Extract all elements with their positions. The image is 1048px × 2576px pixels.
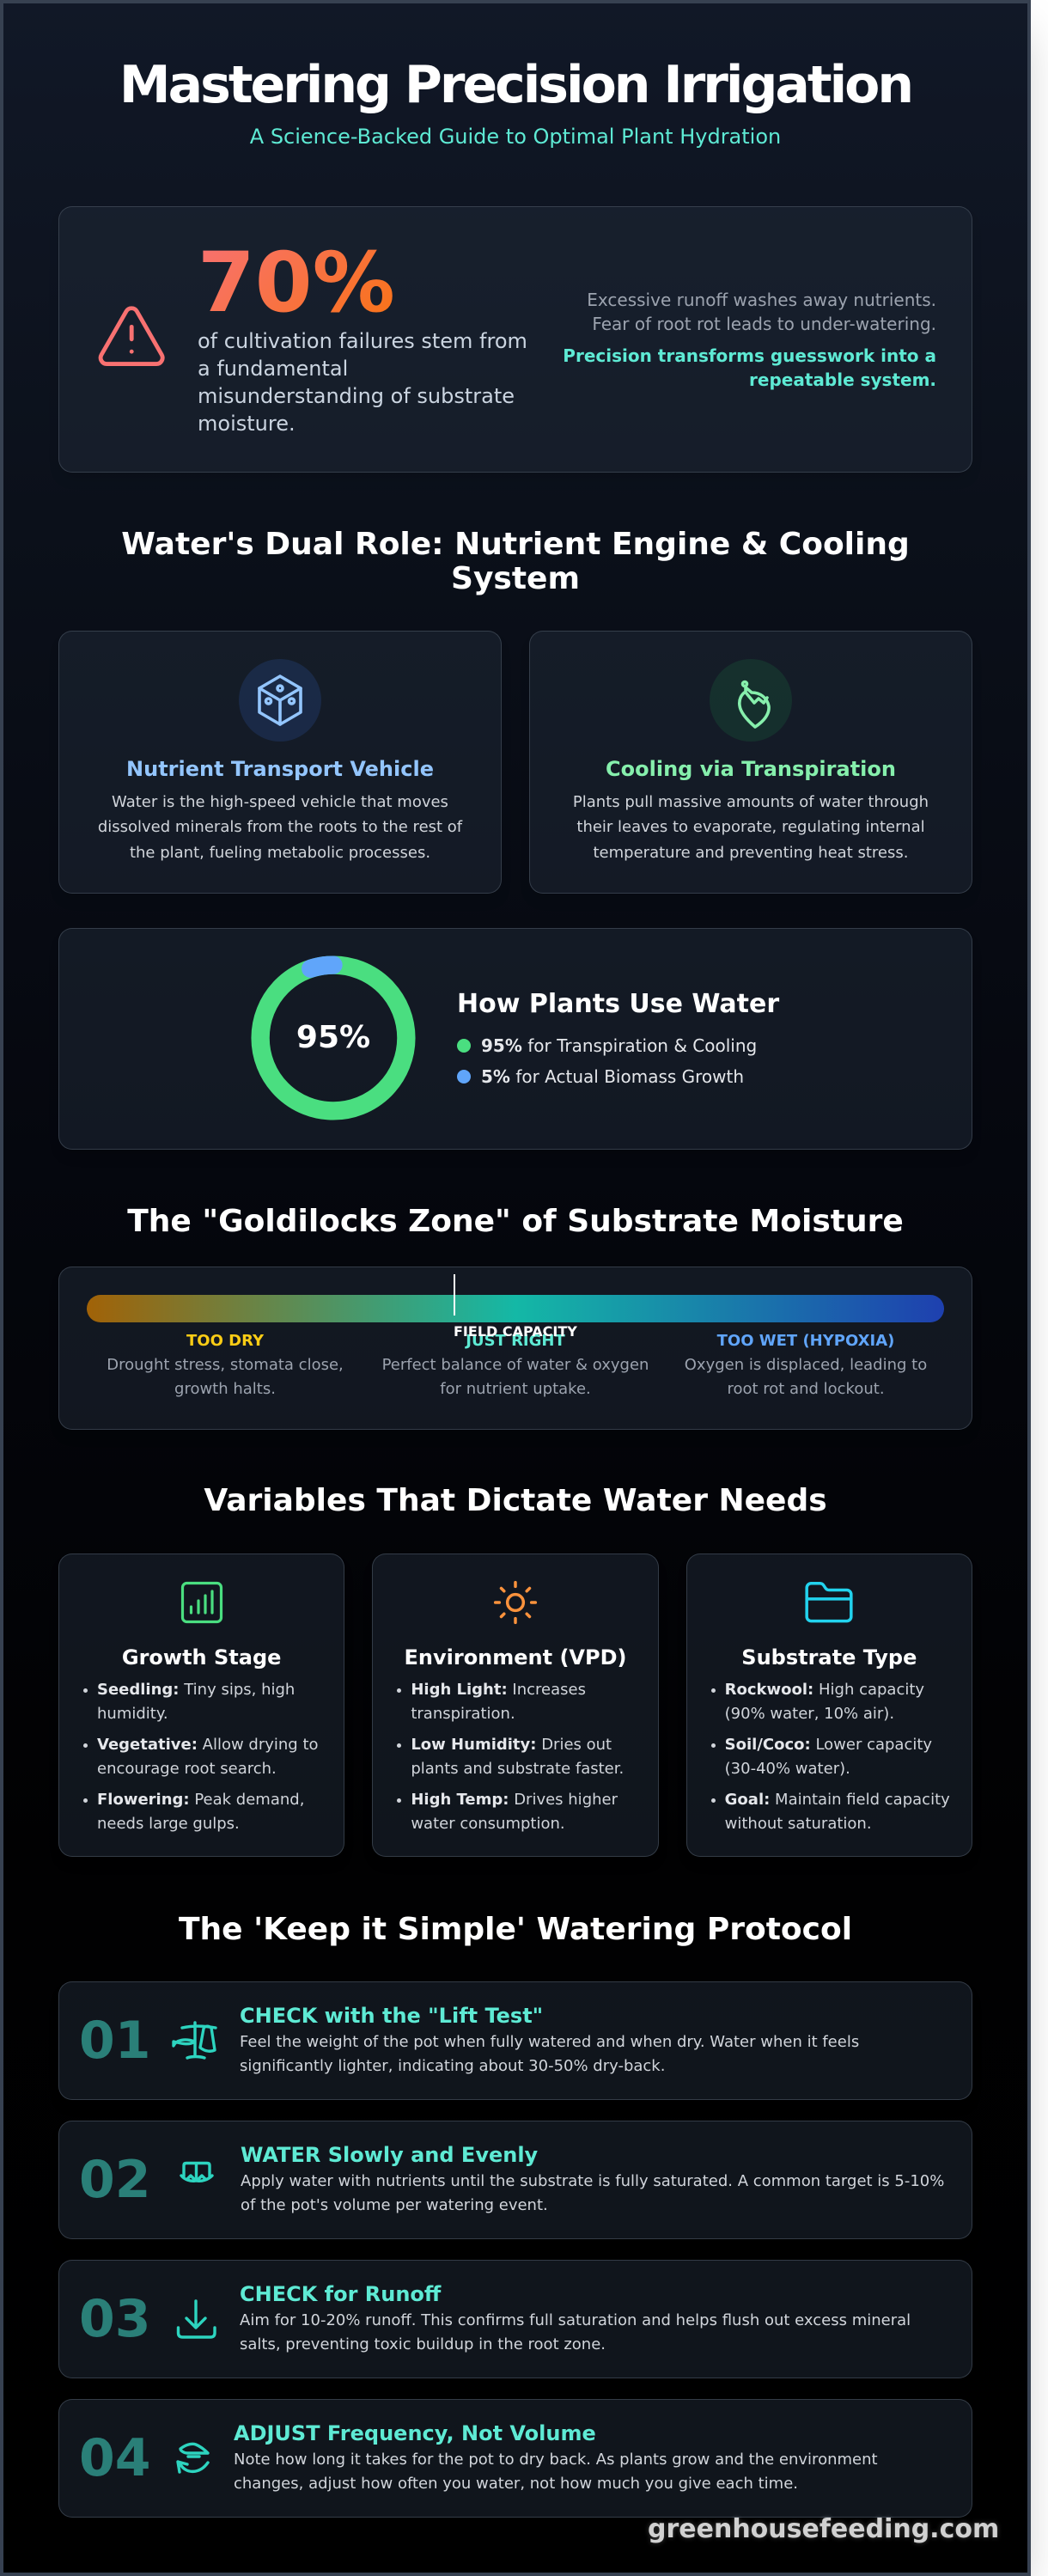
step heading: ADJUST Frequency, Not Volume xyxy=(234,2421,596,2445)
icon: cube xyxy=(258,675,302,726)
big number 70%: 70% xyxy=(198,235,395,331)
step text: Aim for 10-20% runoff. This confirms full saturation and helps flush out excess mineral xyxy=(240,2311,911,2329)
step heading: CHECK with the "Lift Test" xyxy=(240,2004,543,2028)
step text: of the pot's volume per watering event. xyxy=(241,2196,548,2214)
item: soil/coco xyxy=(711,1736,932,1778)
panel: cooling xyxy=(529,631,972,894)
watermark: greenhousefeeding.com xyxy=(648,2514,999,2544)
item: high light: High Light: Increases xyxy=(411,1681,586,1699)
item: low humidity: plants and substrate faster. xyxy=(411,1760,624,1778)
step text: changes, adjust how often you water, not how much you give each time. xyxy=(234,2475,798,2493)
field capacity label: FIELD CAPACITY xyxy=(454,1323,577,1340)
step text: Apply water with nutrients until the substrate is fully saturated. A common target is 5-10% xyxy=(241,2172,944,2190)
icon: blue circle with cube xyxy=(239,659,321,742)
item: high light: transpiration. xyxy=(411,1705,515,1723)
just right column: JUST RIGHT xyxy=(466,1332,565,1350)
item: goal: Goal: Maintain field capacity xyxy=(725,1791,950,1809)
item: low humidity xyxy=(397,1736,624,1778)
legend: transpiration: 95% for Transpiration & Cooling xyxy=(481,1035,757,1056)
step text: Note how long it takes for the pot to dry back. As plants grow and the environment xyxy=(234,2451,878,2469)
step number: 04 xyxy=(79,2428,151,2488)
item: high temp: High Temp: Drives higher xyxy=(411,1791,618,1809)
panel: water use donut chart xyxy=(58,928,972,1150)
step text: Feel the weight of the pot when fully watered and when dry. Water when it feels xyxy=(240,2033,859,2051)
item: high light xyxy=(397,1681,586,1723)
item: vegetative: encourage root search. xyxy=(97,1760,277,1778)
step text xyxy=(234,2451,878,2493)
item: goal xyxy=(711,1791,950,1833)
step number: 02 xyxy=(79,2150,151,2210)
card text: their leaves to evaporate, regulating internal xyxy=(576,818,925,836)
card heading: Growth Stage xyxy=(122,1645,281,1670)
title: Mastering Precision Irrigation xyxy=(119,55,911,115)
too dry column: TOO DRY xyxy=(186,1332,264,1350)
step text xyxy=(241,2172,944,2214)
heading: goldilocks: The "Goldilocks Zone" of Substrate Moisture xyxy=(127,1204,904,1239)
step text xyxy=(240,2033,859,2075)
solution text xyxy=(563,345,936,390)
donut value: 95% xyxy=(296,1020,370,1055)
just right column: Perfect balance of water & oxygen xyxy=(382,1356,649,1374)
item: vegetative: Vegetative: Allow drying to xyxy=(97,1736,319,1754)
just right column xyxy=(382,1332,649,1398)
icon: warning triangle xyxy=(98,306,165,366)
card text: Plants pull massive amounts of water through xyxy=(573,793,929,811)
too wet column: Oxygen is displaced, leading to xyxy=(685,1356,927,1374)
solution text: repeatable system. xyxy=(749,369,936,390)
too dry column: growth halts. xyxy=(174,1380,276,1398)
step heading: WATER Slowly and Evenly xyxy=(241,2143,538,2167)
too wet column: TOO WET (HYPOXIA) xyxy=(717,1332,894,1350)
card text: Water is the high-speed vehicle that moves xyxy=(112,793,448,811)
card heading: Substrate Type xyxy=(741,1645,917,1670)
card text: temperature and preventing heat stress. xyxy=(593,844,909,861)
panel: 70% failure statistic xyxy=(58,206,972,473)
statistic description: a fundamental xyxy=(198,357,348,381)
icon: watering tray xyxy=(180,2162,214,2182)
statistic description: misunderstanding of substrate xyxy=(198,384,515,408)
card text xyxy=(573,793,929,861)
card heading: Cooling via Transpiration xyxy=(606,757,896,781)
icon: green circle xyxy=(710,659,792,742)
card heading: Nutrient Transport Vehicle xyxy=(126,757,434,781)
card text xyxy=(98,793,462,861)
icon: sun xyxy=(493,1581,538,1624)
icon: leaf xyxy=(738,681,771,729)
icon: scale with plant xyxy=(172,2021,217,2060)
item: rockwool: Rockwool: High capacity xyxy=(725,1681,924,1699)
panel: step 1 xyxy=(58,1981,972,2100)
item: rockwool xyxy=(711,1681,924,1723)
heading: protocol: The 'Keep it Simple' Watering Protocol xyxy=(179,1912,852,1947)
heading: dual role xyxy=(121,527,910,596)
card text: dissolved minerals from the roots to the rest of xyxy=(98,818,462,836)
item: high temp xyxy=(397,1791,618,1833)
statistic description: of cultivation failures stem from xyxy=(198,329,527,353)
too dry column xyxy=(107,1332,344,1398)
heading: dual role: System xyxy=(451,561,580,596)
too wet column xyxy=(685,1332,927,1398)
icon: download tray xyxy=(177,2299,216,2339)
moisture gradient bar xyxy=(87,1295,944,1322)
step text xyxy=(240,2311,911,2353)
heading: variables: Variables That Dictate Water Needs xyxy=(204,1483,827,1518)
item: flowering: Flowering: Peak demand, xyxy=(97,1791,304,1809)
subtitle: A Science-Backed Guide to Optimal Plant Hydration xyxy=(250,125,781,149)
step text: salts, preventing toxic buildup in the root zone. xyxy=(240,2335,606,2353)
panel: growth stage xyxy=(58,1554,344,1857)
step text: significantly lighter, indicating about 30-50% dry-back. xyxy=(240,2057,665,2075)
item: low humidity: Low Humidity: Dries out xyxy=(411,1736,612,1754)
solution text: Precision transforms guesswork into a xyxy=(563,345,936,366)
panel: substrate xyxy=(686,1554,972,1857)
step number: 03 xyxy=(79,2289,151,2349)
donut chart xyxy=(251,955,416,1120)
item: seedling: humidity. xyxy=(97,1705,168,1723)
item: flowering: needs large gulps. xyxy=(97,1815,240,1833)
panel: moisture scale xyxy=(58,1267,972,1430)
item: goal: without saturation. xyxy=(725,1815,872,1833)
problem text: Excessive runoff washes away nutrients. xyxy=(587,290,936,310)
card heading: Environment (VPD) xyxy=(404,1645,626,1670)
item: soil/coco: Soil/Coco: Lower capacity xyxy=(725,1736,932,1754)
panel: step 2 xyxy=(58,2121,972,2239)
step number: 01 xyxy=(79,2011,151,2071)
item: rockwool: (90% water, 10% air). xyxy=(725,1705,894,1723)
panel: environment xyxy=(372,1554,659,1857)
icon: folder xyxy=(805,1582,853,1622)
icon: adjust cycle xyxy=(176,2442,210,2474)
item: seedling: Seedling: Tiny sips, high xyxy=(97,1681,295,1699)
item: flowering xyxy=(83,1791,304,1833)
card text: the plant, fueling metabolic processes. xyxy=(130,844,430,861)
panel: step 4 xyxy=(58,2399,972,2518)
icon: growth chart xyxy=(180,1581,223,1624)
too dry column: Drought stress, stomata close, xyxy=(107,1356,344,1374)
item: soil/coco: (30-40% water). xyxy=(725,1760,850,1778)
statistic description xyxy=(198,329,527,436)
just right column: for nutrient uptake. xyxy=(440,1380,591,1398)
item: vegetative xyxy=(83,1736,319,1778)
legend: biomass: 5% for Actual Biomass Growth xyxy=(481,1066,744,1087)
too wet column: root rot and lockout. xyxy=(727,1380,885,1398)
step heading: CHECK for Runoff xyxy=(240,2282,441,2306)
problem text xyxy=(587,290,936,334)
panel: nutrient transport xyxy=(58,631,502,894)
problem text: Fear of root rot leads to under-watering. xyxy=(592,314,936,334)
item: seedling xyxy=(83,1681,295,1723)
statistic description: moisture. xyxy=(198,412,296,436)
item: high temp: water consumption. xyxy=(411,1815,565,1833)
chart heading: How Plants Use Water xyxy=(457,989,779,1019)
field capacity marker xyxy=(454,1274,455,1315)
heading: dual role: Water's Dual Role: Nutrient Engine & Cooling xyxy=(121,527,910,562)
panel: step 3 xyxy=(58,2260,972,2378)
